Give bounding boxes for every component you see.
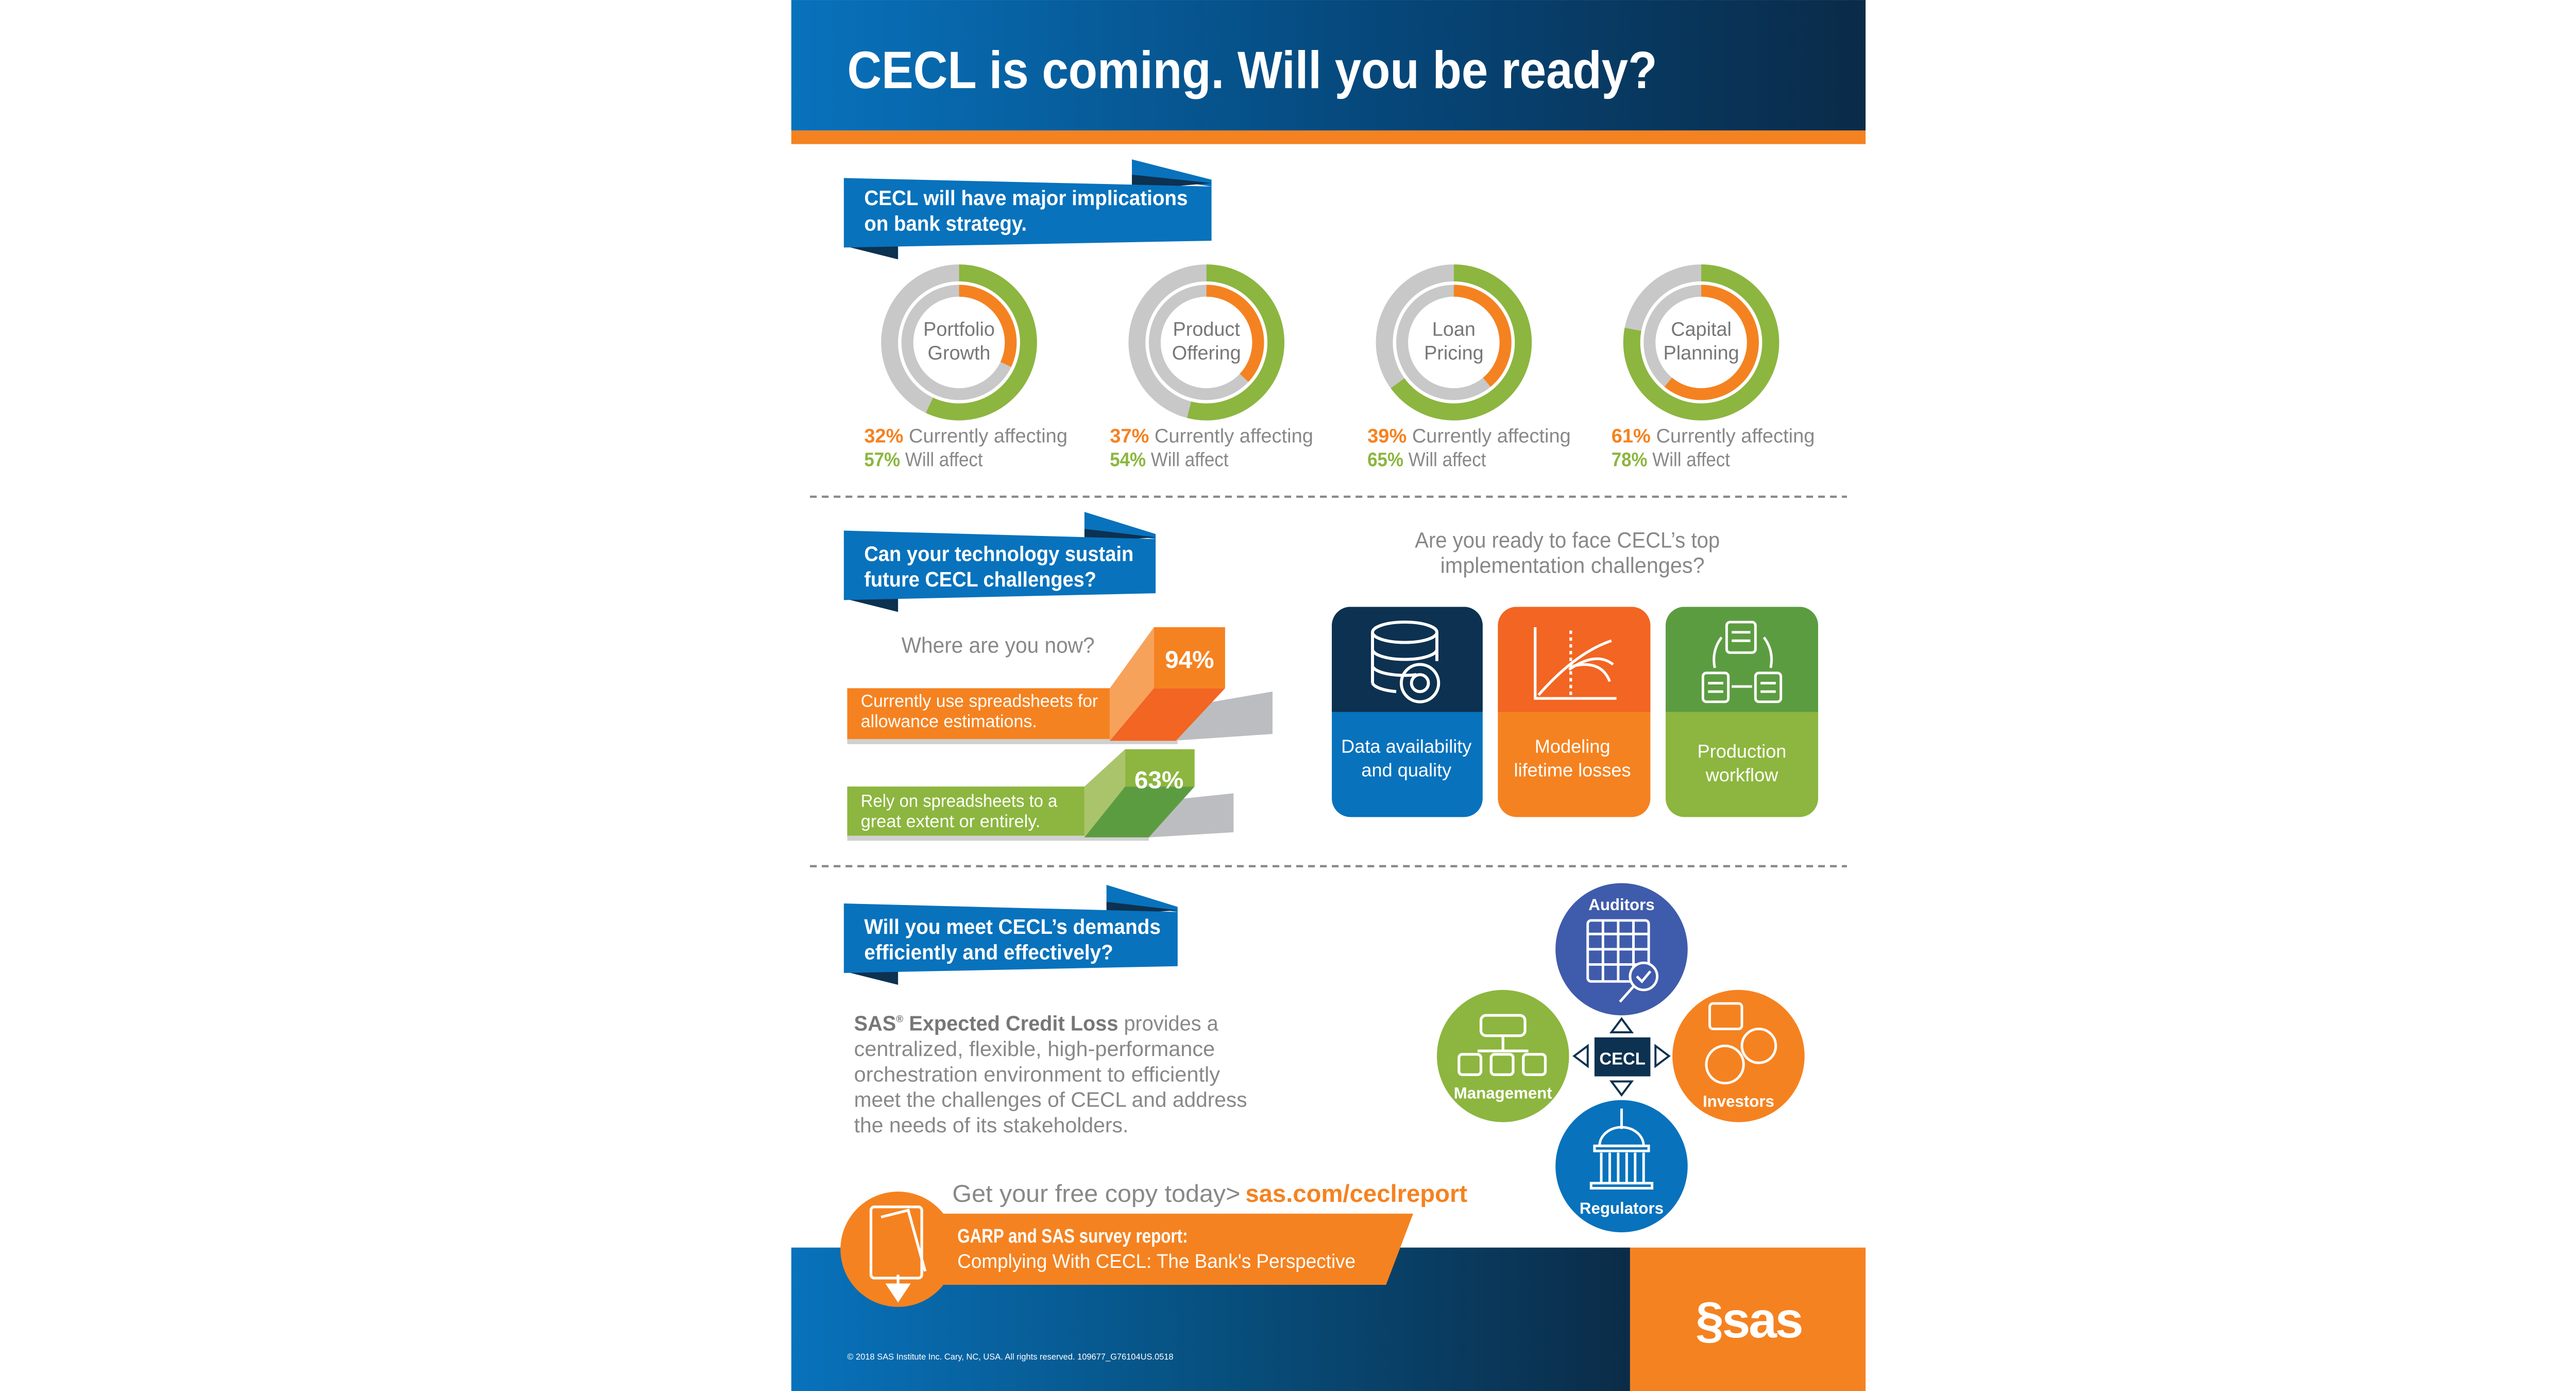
paragraph: SAS Expected Credit Loss: the needs of its stakeholders. bbox=[854, 1113, 1128, 1137]
icon: database bbox=[1372, 622, 1438, 702]
arrows bbox=[1574, 1019, 1669, 1095]
paragraph: SAS Expected Credit Loss: centralized, flexible, high-performance bbox=[854, 1037, 1215, 1061]
donut: product offering: Offering bbox=[1172, 342, 1241, 364]
stakeholders diagram bbox=[1437, 883, 1805, 1232]
donut stats text: 32% Currently affecting bbox=[864, 425, 1067, 447]
text: implementation challenges question: implementation challenges? bbox=[1440, 554, 1705, 578]
donut stats text: 54% Will affect bbox=[1110, 449, 1229, 471]
tile: data availability bbox=[1332, 607, 1483, 817]
bar: 63% rely on spreadsheets: 63% bbox=[1134, 766, 1183, 794]
donut stats text bbox=[864, 425, 1815, 471]
circle: auditors bbox=[1555, 883, 1688, 1015]
paragraph: SAS Expected Credit Loss: orchestration environment to efficiently bbox=[854, 1062, 1220, 1086]
donut: product offering bbox=[1137, 273, 1276, 412]
call to action: Get your free copy today> bbox=[952, 1180, 1240, 1208]
bar: 63% rely on spreadsheets: Rely on spreadsheets to a bbox=[861, 792, 1058, 811]
copyright: © 2018 SAS Institute Inc. Cary, NC, USA. All rights reserved. 109677_G76104US.0518 bbox=[847, 1352, 1174, 1362]
ribbon: demands: efficiently and effectively? bbox=[864, 941, 1113, 964]
paragraph: SAS Expected Credit Loss: SAS bbox=[854, 1012, 1118, 1035]
bar: 63% rely on spreadsheets: great extent or entirely. bbox=[861, 812, 1040, 831]
tile: production workflow: Production bbox=[1698, 741, 1786, 762]
ribbon: bank strategy: CECL will have major implications bbox=[864, 186, 1188, 210]
ribbon: bank strategy: on bank strategy. bbox=[864, 211, 1027, 235]
header band bbox=[791, 0, 1866, 144]
tile: modeling: lifetime losses bbox=[1514, 759, 1631, 780]
bar: 94% spreadsheets: allowance estimations. bbox=[861, 712, 1037, 731]
ribbon: bank strategy bbox=[844, 159, 1212, 259]
bar: 94% spreadsheets: Currently use spreadsheets for bbox=[861, 692, 1098, 711]
donut stats text: 61% Currently affecting bbox=[1612, 425, 1815, 447]
donut: loan pricing bbox=[1384, 273, 1523, 412]
paragraph: SAS Expected Credit Loss: Expected Credit Loss bbox=[903, 1012, 1118, 1035]
donut: loan pricing: Loan bbox=[1432, 319, 1476, 340]
donut stats text: 65% Will affect bbox=[1367, 449, 1486, 471]
circle: investors bbox=[1672, 990, 1805, 1122]
ribbon: technology: future CECL challenges? bbox=[864, 567, 1096, 591]
text: sas.com/ceclreport bbox=[1245, 1180, 1467, 1208]
circle: investors: Investors bbox=[1703, 1093, 1774, 1111]
donut stats text: 37% Currently affecting bbox=[1110, 425, 1313, 447]
donut: portfolio growth bbox=[890, 273, 1028, 412]
icon: chart bbox=[1535, 627, 1617, 698]
report banner bbox=[840, 1192, 1413, 1307]
tile: data availability: and quality bbox=[1361, 759, 1451, 780]
text: where are you now: Where are you now? bbox=[902, 633, 1095, 658]
paragraph: SAS Expected Credit Loss: meet the challenges of CECL and address bbox=[854, 1088, 1247, 1112]
donut: loan pricing: Pricing bbox=[1424, 342, 1484, 364]
bar: 94% spreadsheets: 94% bbox=[1165, 646, 1214, 674]
tile: modeling: Modeling bbox=[1535, 735, 1610, 757]
icon: workflow bbox=[1703, 622, 1781, 702]
donut: capital planning bbox=[1632, 273, 1771, 412]
tile: production workflow: workflow bbox=[1705, 764, 1778, 785]
report banner: Complying With CECL: The Bank's Perspective bbox=[957, 1251, 1355, 1272]
ribbon: technology: Can your technology sustain bbox=[864, 542, 1133, 566]
tile: data availability: Data availability bbox=[1341, 735, 1471, 757]
donut: capital planning: Planning bbox=[1663, 342, 1739, 364]
text: implementation challenges question bbox=[1415, 528, 1720, 578]
circle: regulators bbox=[1555, 1100, 1688, 1232]
paragraph: SAS Expected Credit Loss: provides a bbox=[1124, 1012, 1222, 1035]
title: CECL is coming. Will you be ready? bbox=[847, 41, 1657, 99]
CECL box bbox=[1595, 1037, 1650, 1077]
ribbon: demands bbox=[844, 885, 1178, 985]
paragraph: SAS Expected Credit Loss: ® bbox=[896, 1013, 904, 1025]
circle: auditors: Auditors bbox=[1588, 896, 1655, 914]
footer band bbox=[791, 1248, 1866, 1391]
circle: management: Management bbox=[1454, 1084, 1552, 1102]
donut: portfolio growth: Growth bbox=[928, 342, 990, 364]
paragraph: SAS Expected Credit Loss bbox=[854, 1012, 1247, 1137]
circle: management bbox=[1437, 990, 1569, 1122]
icon: report download bbox=[871, 1207, 925, 1300]
text: implementation challenges question: Are you ready to face CECL’s top bbox=[1415, 528, 1720, 552]
donut: portfolio growth: Portfolio bbox=[923, 319, 995, 340]
circle: regulators: Regulators bbox=[1580, 1199, 1664, 1217]
report banner: GARP and SAS survey report: bbox=[957, 1226, 1188, 1247]
donut stats text: 39% Currently affecting bbox=[1367, 425, 1571, 447]
ribbon: technology bbox=[844, 512, 1156, 612]
donut stats text: 57% Will affect bbox=[864, 449, 983, 471]
donut: capital planning: Capital bbox=[1671, 319, 1732, 340]
donut stats text: 78% Will affect bbox=[1612, 449, 1730, 471]
tile: production workflow bbox=[1666, 607, 1818, 817]
CECL box: CECL bbox=[1599, 1049, 1646, 1068]
tile: modeling bbox=[1498, 607, 1650, 817]
bar: 94% spreadsheets bbox=[847, 627, 1273, 744]
ribbon: demands: Will you meet CECL’s demands bbox=[864, 915, 1161, 938]
bar: 63% rely on spreadsheets bbox=[847, 749, 1233, 841]
logo: sas: §sas bbox=[1696, 1292, 1802, 1348]
donut: product offering: Product bbox=[1173, 319, 1240, 340]
